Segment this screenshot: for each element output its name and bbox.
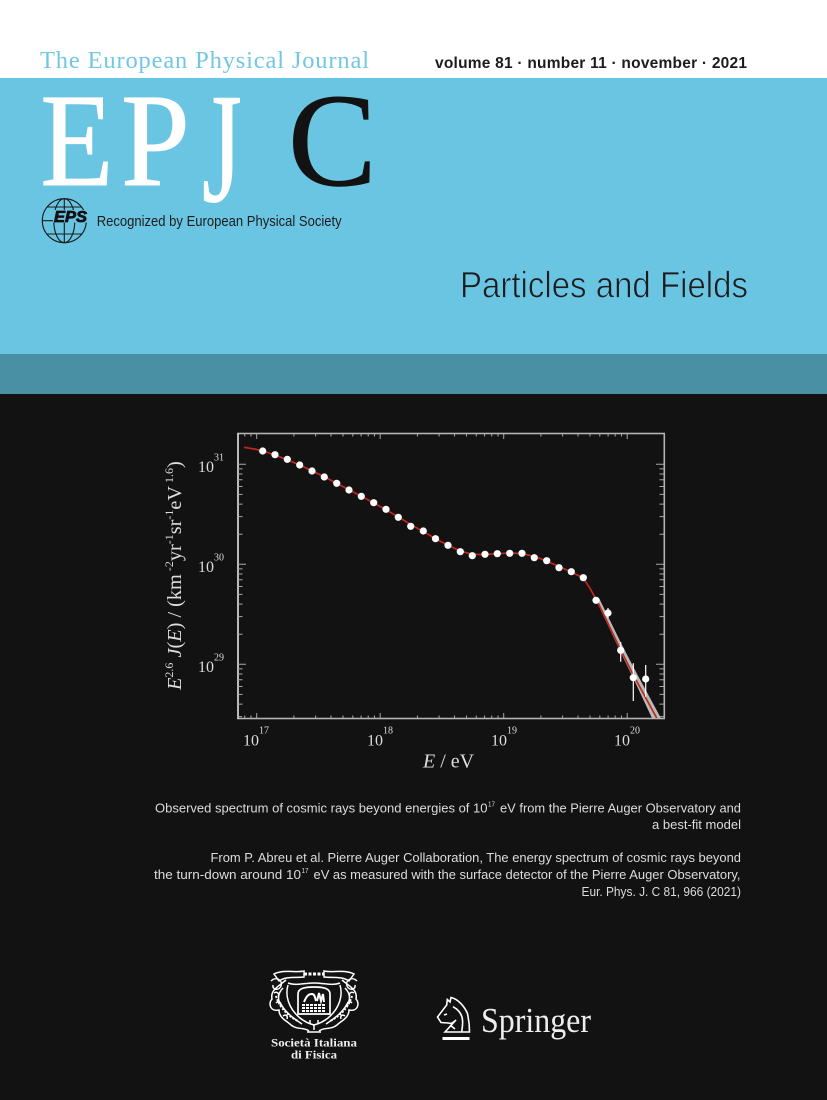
y axis title: J <box>164 648 186 663</box>
x axis tick labels <box>243 726 640 750</box>
wordmark: Springer <box>481 1001 591 1040</box>
x axis tick labels: 19 <box>507 726 517 736</box>
journal name: The European Physical Journal <box>40 47 369 74</box>
y axis tick labels: 10 <box>198 459 214 476</box>
caption: citation: the turn-down around 10 <box>154 867 301 882</box>
blue title panel <box>0 78 827 354</box>
y axis tick labels: 31 <box>214 452 224 464</box>
logo: Springer <box>438 998 591 1040</box>
caption: citation: 17 <box>302 866 308 875</box>
y axis tick labels <box>198 452 224 676</box>
caption: citation: From P. Abreu et al. Pierre Auger Collaboration, The energy spectrum of cosmic rays beyond <box>210 850 741 865</box>
y axis title: eV <box>164 486 186 510</box>
caption: figure description: eV from the Pierre Auger Observatory and <box>500 800 741 816</box>
crest drawing <box>270 971 358 1032</box>
chart: cosmic ray spectrum <box>162 433 664 772</box>
x axis tick labels: 20 <box>630 726 640 736</box>
uncertainty band <box>596 598 661 718</box>
y axis tick labels: 30 <box>214 552 224 564</box>
y axis tick labels: 10 <box>198 659 214 676</box>
crest name: Società Italiana <box>271 1038 357 1050</box>
axis ticks <box>238 434 664 718</box>
caption: figure description: Observed spectrum of cosmic rays beyond energies of 10 <box>155 800 488 816</box>
caption: figure description <box>155 800 741 832</box>
logotype: EPJ C <box>40 61 377 235</box>
x axis tick labels: 10 <box>243 732 259 750</box>
y axis title: yr <box>164 544 186 561</box>
y axis title: -1 <box>162 510 176 520</box>
plot frame <box>238 434 664 718</box>
caption: figure description: 17 <box>488 800 495 808</box>
error bars <box>608 608 646 701</box>
logotype: EPJ C: E <box>40 67 113 214</box>
y axis title: 1.6 <box>162 468 176 486</box>
caption: citation <box>154 850 741 899</box>
y axis title: ) <box>164 461 186 468</box>
x axis tick labels: 17 <box>259 726 269 736</box>
icon: EPS globe <box>42 199 88 243</box>
icon: EPS globe: EPS <box>54 209 88 226</box>
logo: Società Italiana di Fisica crest <box>270 971 358 1062</box>
crest name: di Fisica <box>291 1050 337 1062</box>
icon: chess knight <box>438 998 470 1032</box>
data points <box>259 447 649 683</box>
y axis tick labels: 29 <box>214 652 224 664</box>
crest name <box>271 1038 357 1062</box>
y axis title: E <box>164 677 186 691</box>
teal stripe <box>0 354 827 394</box>
y axis title: -2 <box>162 561 176 574</box>
y axis tick labels: 10 <box>198 559 214 576</box>
x axis tick labels: 10 <box>491 732 507 750</box>
y axis title: 2.6 <box>162 663 176 678</box>
best-fit model curve <box>244 447 657 718</box>
white masthead band <box>0 0 827 78</box>
logotype: EPJ C: P <box>121 67 190 214</box>
x axis tick labels: 10 <box>614 732 630 750</box>
caption: citation: Eur. Phys. J. C 81, 966 (2021) <box>582 884 741 899</box>
caption: figure description: a best-fit model <box>652 817 741 832</box>
issue line: volume 81 · number 11 · november · 2021 <box>435 55 747 72</box>
knight base bar <box>442 1037 470 1040</box>
recognition text: Recognized by European Physical Society <box>97 214 342 230</box>
caption: citation: eV as measured with the surface detector of the Pierre Auger Observatory, <box>314 867 740 882</box>
y axis title: sr <box>164 519 186 534</box>
y axis title: -1 <box>162 534 176 544</box>
logotype: EPJ C: C <box>288 66 377 214</box>
x axis title: E / eV <box>422 750 475 772</box>
x axis tick labels: 18 <box>383 726 393 736</box>
logotype: EPJ C: J <box>202 61 242 235</box>
black lower panel <box>0 394 827 1100</box>
section title: Particles and Fields <box>460 264 748 306</box>
left axis line <box>237 433 239 719</box>
x axis tick labels: 10 <box>367 732 383 750</box>
y axis title: (E) / (km <box>164 574 186 649</box>
